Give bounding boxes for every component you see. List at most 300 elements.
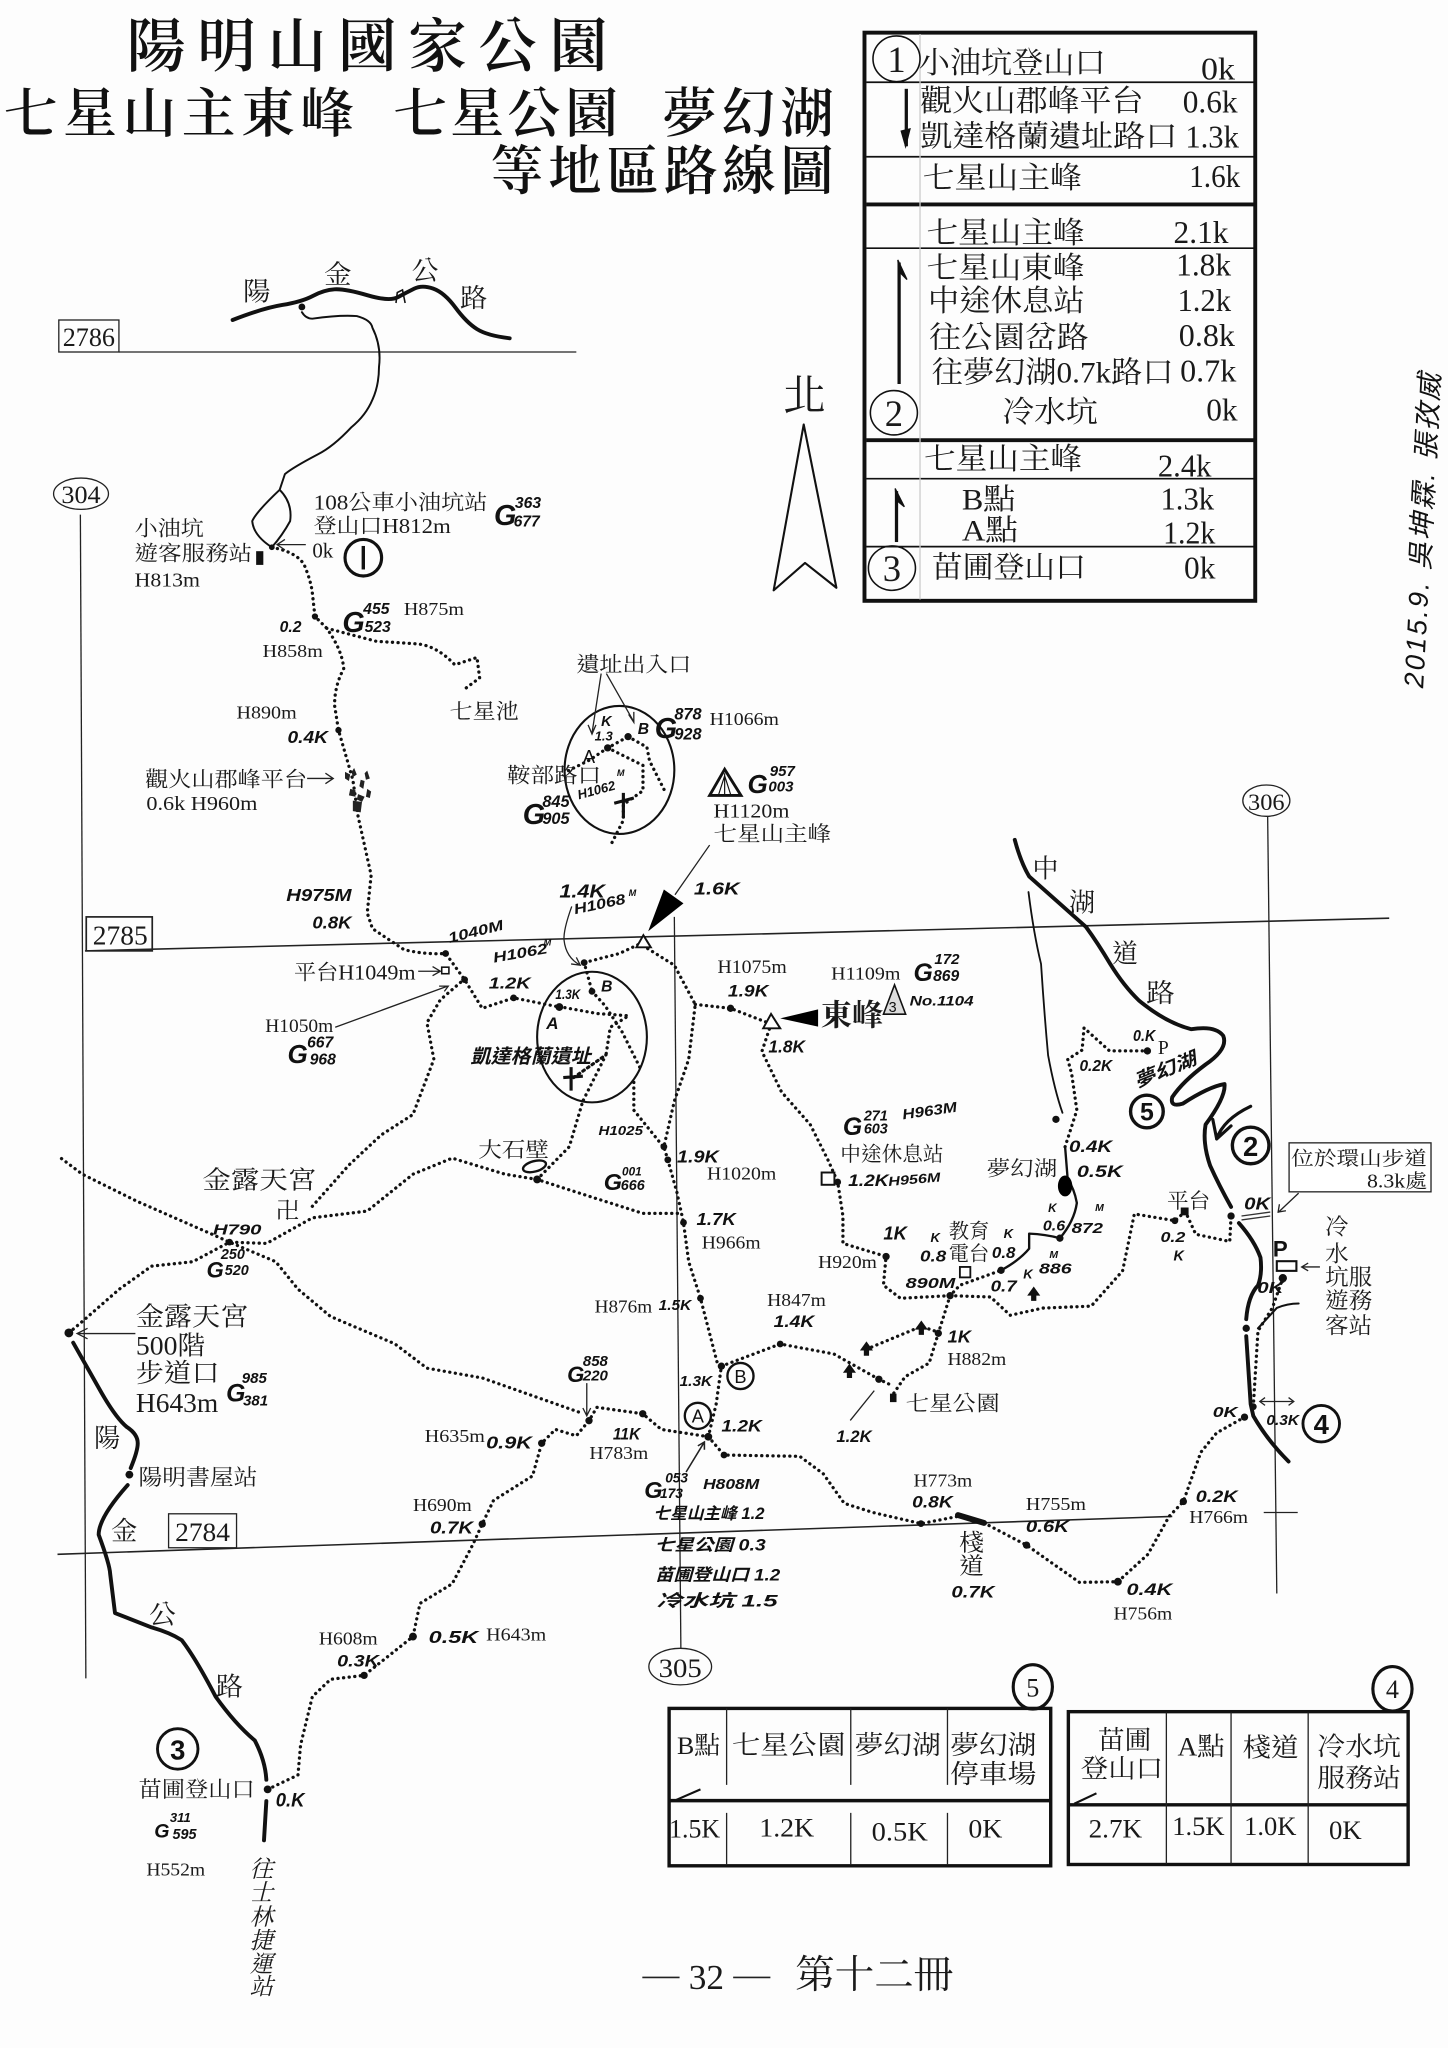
label: 冷水坑服遊務客站: 冷 xyxy=(1325,1214,1349,1239)
grid line 2785: 2785 xyxy=(93,920,148,950)
grid line 2786: 2786 xyxy=(63,323,115,352)
dotted trails xyxy=(61,547,1283,1789)
label: 金露天宮500階步道口 xyxy=(136,1303,248,1418)
panel: 凱達格蘭 ruin circle xyxy=(537,972,647,1102)
icon: 七星公園 black square xyxy=(890,1394,897,1402)
panel: route distance table: 冷水坑 xyxy=(1002,396,1098,429)
label: coordinates G271 603 H963M: 271 xyxy=(863,1109,888,1125)
label: junction note handwritten: 七星公園 0.3 xyxy=(655,1536,766,1554)
label: coordinates G311 595: 311 xyxy=(170,1810,191,1825)
label: 0K with underline: 0K xyxy=(1244,1193,1272,1213)
label: 1.9K west: 1.9K xyxy=(677,1146,720,1166)
panel: route distance table: 0k xyxy=(1184,551,1216,586)
footer: page number and volume xyxy=(642,1954,953,1997)
icon: 平台 square xyxy=(442,967,449,974)
label: coordinates G667 968: 667 xyxy=(307,1035,335,1052)
label: 棧道: 棧 xyxy=(959,1529,984,1556)
label: 七星公園: 七星公園 xyxy=(906,1392,1000,1416)
label: coordinates G455 523 xyxy=(342,601,391,639)
label: 遺址出入口: 遺址出入口 xyxy=(576,652,691,676)
panel: table 4 distances: 1.5K xyxy=(1172,1812,1225,1841)
panel: route distance table: 2.1k xyxy=(1174,215,1229,250)
label: junction note handwritten: 冷水坑 1.5 xyxy=(656,1592,778,1611)
label: junction note handwritten: G xyxy=(644,1477,663,1503)
label: H847m 1.4K: 1.4K xyxy=(774,1312,816,1331)
trail: branch to 七星池 xyxy=(327,628,480,690)
trail: 金露天宮 cross link xyxy=(61,1159,578,1412)
label: 東峰: 東峰 xyxy=(821,999,883,1032)
label: junction note handwritten: H808M xyxy=(703,1477,761,1493)
arrow: to 觀火山郡峰 xyxy=(307,773,333,784)
grid line 305: 305 xyxy=(659,1654,702,1683)
label: junction note handwritten: 苗圃登山口 1.2 xyxy=(655,1565,781,1584)
label: H847m 1.4K xyxy=(767,1290,826,1331)
label: 1.7K: 1.7K xyxy=(697,1209,737,1229)
trail: around 夢幻湖 xyxy=(1065,1028,1147,1147)
label: H1062M 1.2K: H1062 xyxy=(492,941,549,967)
panel: route distance table: 中途休息站 xyxy=(928,285,1085,318)
label: 平台 east: 平台 xyxy=(1167,1189,1210,1213)
label: coordinates G001 666: 666 xyxy=(621,1178,646,1194)
panel: route distance table: B點 xyxy=(962,483,1015,516)
icon: 冷水坑 service station box xyxy=(1277,1261,1296,1271)
label: K 0.6 872M: M xyxy=(1095,1203,1104,1214)
label: 觀火山郡峰平台: 觀火山郡峰平台 xyxy=(145,767,307,791)
panel: table 5 distances: 停車場 xyxy=(950,1760,1036,1789)
arrow: from H1050m xyxy=(335,986,448,1027)
panel: route distance table: 小油坑登山口 xyxy=(919,47,1106,80)
label: K 0.6 872M xyxy=(1043,1202,1104,1237)
road: 陽金公路 south: 路 xyxy=(216,1672,243,1701)
label: 0.4K 0.5K: 0.4K xyxy=(1069,1137,1114,1156)
icon: 平台 black square xyxy=(1181,1208,1189,1215)
arrow: to 金露天宮 trailhead xyxy=(77,1328,135,1339)
label: coordinates G172 869 No.1104: G xyxy=(913,960,933,987)
label: upper ruin A B markers: K xyxy=(601,714,613,730)
label: H858m: H858m xyxy=(263,641,323,661)
road: 陽金公路 north: 陽 xyxy=(243,277,271,306)
label: 0.5K: 0.5K xyxy=(429,1627,480,1647)
panel: 鞍部 ruin circle xyxy=(565,706,674,834)
trail: 金露天宮步道 east xyxy=(69,1158,678,1333)
label: upper ruin A B markers: 1.3 xyxy=(595,729,614,744)
icon: marker B xyxy=(727,1363,754,1389)
label: 1.4K H1068M xyxy=(559,880,637,918)
label: 1040M: 1040M xyxy=(447,917,506,947)
icon: 棧道 thick segment xyxy=(958,1515,984,1523)
label: 1.4K H1068M: M xyxy=(629,888,637,898)
label: 教育電台: 教育 xyxy=(949,1220,989,1243)
label: 金露天宮500階步道口: 步道口 xyxy=(136,1359,220,1388)
arrow: to service station xyxy=(1302,1263,1320,1271)
label: 0.4K: 0.4K xyxy=(288,727,329,747)
panel: table 5 distances: 1.2K xyxy=(759,1813,814,1842)
label: 0.K: 0.K xyxy=(276,1789,306,1811)
arrow: to 凱達格蘭 junction xyxy=(564,906,580,965)
road: 小油坑 access road xyxy=(252,312,380,547)
label: 0K service: 0K xyxy=(1257,1280,1286,1297)
label: 教育電台: 電台 xyxy=(949,1242,989,1265)
label: H875m: H875m xyxy=(404,599,464,619)
label: coordinates G363 677: G xyxy=(494,500,516,532)
label: 往士林捷運站: 士 xyxy=(250,1880,276,1906)
label: H966m: H966m xyxy=(702,1233,761,1253)
label: 1.2K H956M: 1.2K xyxy=(848,1171,891,1190)
panel: table 4 distances: 0K xyxy=(1329,1816,1362,1845)
callout: 位於環山步道 xyxy=(1289,1143,1431,1192)
panel: route distance table: 2 xyxy=(885,393,903,434)
panel: table 4 distances: 1.0K xyxy=(1244,1812,1297,1841)
signature: handwritten date and authors: 2015.9. 吳坤霖. 張孜威 xyxy=(1398,369,1446,690)
panel: table 4 distances: 4 xyxy=(1386,1675,1399,1704)
label: 0.4K H756m: 0.4K xyxy=(1127,1580,1174,1599)
panel: route distance table: 0k xyxy=(1206,393,1238,428)
label: K 0.6 872M: 0.6 xyxy=(1043,1218,1066,1234)
label: H890m: H890m xyxy=(237,702,297,722)
icon: rest station square xyxy=(822,1173,834,1185)
label: K 0.8 890M xyxy=(906,1230,957,1292)
label: H847m 1.4K: H847m xyxy=(767,1290,826,1310)
label: 1.5K near H876m: 1.5K xyxy=(659,1298,693,1314)
label: coordinates G311 595: 595 xyxy=(173,1827,197,1843)
title: 夢幻湖 xyxy=(663,84,834,144)
grid line 2785 xyxy=(85,917,1389,951)
trail: 卍 to 平台 xyxy=(312,979,465,1206)
footer: page number and volume: 32 xyxy=(689,1958,724,1997)
label: 往士林捷運站: 捷 xyxy=(250,1929,277,1955)
trail: peak to 凱達格蘭 xyxy=(584,942,643,991)
road: 中湖道路: 中 xyxy=(1032,855,1059,884)
road: 陽金公路 south: 公 xyxy=(149,1601,176,1630)
arrow: main peak wedge xyxy=(648,845,710,931)
arrow: to A point xyxy=(686,1442,704,1472)
icon: radio station square xyxy=(960,1267,970,1277)
panel: table 5 distances: B點 xyxy=(677,1732,720,1760)
road: 陽金公路 north xyxy=(233,257,510,338)
icon: east peak triangle xyxy=(763,1014,780,1028)
icon: rock xyxy=(522,1158,547,1174)
road: 中湖道路: 路 xyxy=(1146,979,1175,1008)
label: 小油坑遊客服務站: 遊客服務站 xyxy=(135,541,252,565)
label: coordinates G845 905: G xyxy=(523,799,545,831)
icon: cross upper ruin xyxy=(614,793,634,818)
label: 鞍部路口: 鞍部路口 xyxy=(507,763,601,787)
label: coordinates G667 968: G xyxy=(288,1039,308,1069)
label: 108公車小油坑站 xyxy=(314,490,487,538)
label: coordinates G985 381: G xyxy=(226,1380,245,1407)
icon: north arrow xyxy=(774,374,836,590)
label: 1K H882m: H882m xyxy=(947,1349,1006,1369)
label: 平台H1049m: 平台H1049m xyxy=(294,961,416,985)
label: coordinates G878 928: 928 xyxy=(674,725,703,743)
label: K 0.6 872M: 872 xyxy=(1072,1221,1103,1237)
label: junction note handwritten: 173 xyxy=(660,1486,683,1501)
label: 觀火山郡峰平台 xyxy=(145,767,307,815)
label: 夢幻湖: 夢幻湖 xyxy=(987,1158,1057,1181)
label: coordinates G985 381: 985 xyxy=(242,1370,267,1387)
label: 1.2K H956M: H956M xyxy=(888,1169,942,1189)
label: H790 G250 520 xyxy=(206,1222,261,1282)
icon: route marker 5 xyxy=(1131,1095,1163,1128)
label: H755m 0.6K xyxy=(1026,1494,1086,1536)
label: junction note handwritten xyxy=(644,1470,781,1611)
label: 冷水坑服遊務客站: 坑服 xyxy=(1325,1265,1372,1290)
arrow: east peak wedge xyxy=(780,1009,818,1027)
icon: north arrow: 北 xyxy=(783,374,826,420)
label: K 0.8 890M: 0.8 xyxy=(920,1249,947,1266)
trail: 凱達格蘭 ruin xyxy=(559,991,640,1101)
label: 0.4K 0.5K: 0.5K xyxy=(1077,1162,1125,1181)
label: 0.7K xyxy=(991,1267,1034,1296)
label: 往士林捷運站: 站 xyxy=(250,1974,276,2000)
label: 108公車小油坑站: 登山口H812m xyxy=(314,514,451,538)
label: 陽明書屋站: 陽明書屋站 xyxy=(139,1465,257,1490)
icon: route marker 4 xyxy=(1303,1405,1340,1442)
label: 0.4K 0.5K xyxy=(1069,1137,1125,1181)
label: upper ruin A B markers: A xyxy=(583,746,596,767)
road: 冷水坑 spur xyxy=(1258,1304,1299,1328)
title: 陽明山國家公園 xyxy=(127,15,608,80)
panel: table 5 distances: 5 xyxy=(1026,1674,1039,1703)
label: H790 G250 520: 520 xyxy=(225,1263,249,1279)
icon: visitor centre square xyxy=(256,551,263,565)
label: 0.2: 0.2 xyxy=(280,619,302,636)
label: 七星池: 七星池 xyxy=(450,699,519,723)
label: coordinates G455 523: 455 xyxy=(362,601,390,618)
label: H1050m: H1050m xyxy=(265,1016,334,1037)
label: 0.7K: 0.7K xyxy=(430,1517,475,1537)
label: coordinates G667 968 xyxy=(288,1035,336,1069)
label: coordinates G271 603 H963M: H963M xyxy=(901,1100,959,1123)
panel: route distance table: 苗圃登山口 xyxy=(932,551,1086,584)
label: 1.8K: 1.8K xyxy=(768,1037,806,1057)
label: 教育電台 xyxy=(949,1220,989,1265)
icon: cross lower ruin xyxy=(563,1067,583,1091)
grid line 2784: 2784 xyxy=(175,1518,230,1547)
label: H1062M 1.2K: M xyxy=(544,938,552,948)
panel: route distance table: A點 xyxy=(962,515,1018,548)
label: 0.4K H756m: H756m xyxy=(1113,1604,1172,1624)
panel: route distance table: 凱達格蘭遺址路口 xyxy=(920,120,1177,153)
icon: east peak benchmark xyxy=(883,985,906,1016)
label: H1075m: H1075m xyxy=(717,957,787,978)
label: 0.9K: 0.9K xyxy=(486,1432,533,1452)
label: coordinates G271 603 H963M: 603 xyxy=(864,1122,888,1138)
label: 0.7K: K xyxy=(1023,1267,1034,1282)
panel: table 4 distances: 棧道 xyxy=(1243,1734,1299,1763)
label: H1066m: H1066m xyxy=(710,709,779,729)
label: coordinates G363 677 xyxy=(494,495,541,532)
label: 冷水坑服遊務客站 xyxy=(1325,1214,1372,1339)
trail: north end to 冷水坑 xyxy=(1253,1278,1283,1407)
label: 1K north: 1K xyxy=(883,1223,909,1244)
label: coordinates G271 603 H963M xyxy=(843,1100,959,1141)
label: 金露天宮500階步道口: H643m xyxy=(136,1388,218,1418)
panel: table 4 distances: 2.7K xyxy=(1089,1815,1142,1844)
grid line 305 xyxy=(649,917,712,1685)
label: coordinates G311 595: G xyxy=(154,1821,169,1843)
label: H766m 0.2K: H766m xyxy=(1189,1507,1248,1527)
label: coordinates G878 928: 878 xyxy=(674,706,703,724)
icon: 夢幻湖 lake xyxy=(1058,1176,1072,1196)
label: 往士林捷運站 xyxy=(250,1857,277,2000)
label: 0.7K: 0.7 xyxy=(991,1279,1018,1296)
label: 大石壁: 大石壁 xyxy=(478,1138,549,1162)
label: H755m 0.6K: 0.6K xyxy=(1026,1517,1071,1536)
icon: marker A: A xyxy=(692,1405,705,1426)
panel: route distance table: 1.8k xyxy=(1176,248,1231,283)
label: 1.3K: 1.3K xyxy=(680,1374,714,1390)
panel: route distance table: 0.8k xyxy=(1179,318,1235,353)
label: 0.K P xyxy=(1133,1028,1169,1059)
label: ruin A B 1.3K: A xyxy=(545,1014,559,1033)
label: coordinates G001 666: 001 xyxy=(622,1166,642,1179)
trail: A point east to 棧道 and 冷水坑 xyxy=(708,1417,1245,1582)
label: H552m: H552m xyxy=(146,1860,205,1880)
icon: route marker 3: 3 xyxy=(170,1734,185,1765)
label: coordinates G172 869 No.1104: 869 xyxy=(933,968,960,985)
label: 0.2 K east xyxy=(1160,1230,1186,1264)
label: H1062M 1.2K: 1.2K xyxy=(489,976,533,993)
label: 小油坑遊客服務站: H813m xyxy=(135,570,200,591)
label: 108公車小油坑站: 108公車小油坑站 xyxy=(314,490,487,514)
label: coordinates G271 603 H963M: G xyxy=(843,1114,862,1141)
panel: table 5 distances: 夢幻湖 xyxy=(950,1731,1036,1760)
trail: 大石壁 to ruin xyxy=(537,1082,663,1179)
icon: forest trees xyxy=(843,1287,1040,1378)
panel: route distance table: 0.6k xyxy=(1183,84,1238,119)
road: 陽金公路 south: 金 xyxy=(111,1517,137,1546)
panel: table 4 distances: 冷水坑 xyxy=(1317,1732,1401,1761)
road: 陽金公路 north: 路 xyxy=(460,284,487,313)
trail: 七星公園 link xyxy=(893,1296,950,1395)
label: junction note handwritten: 七星山主峰 1.2 xyxy=(653,1505,765,1523)
label: coordinates G172 869 No.1104: No.1104 xyxy=(910,994,974,1009)
title: 等地區路線圖 xyxy=(490,141,834,201)
label: H783m: H783m xyxy=(589,1443,648,1463)
label: coordinates G363 677: 363 xyxy=(515,495,541,512)
label: 0.8K: 0.8K xyxy=(312,913,353,933)
label: coordinates G455 523: 523 xyxy=(365,619,391,636)
road: 陽金公路 south xyxy=(73,1343,266,1840)
label: H790 G250 520: G xyxy=(206,1257,224,1282)
label: 金露天宮500階步道口: 金露天宮 xyxy=(136,1303,248,1332)
label: coordinates G001 666 xyxy=(604,1166,646,1195)
arrow: to start point xyxy=(277,539,306,550)
label: coordinates G858 220: 220 xyxy=(582,1368,609,1385)
grid line 2786 xyxy=(59,320,576,352)
road: 中湖道路: 湖 xyxy=(1069,889,1095,918)
panel: route distance table: 七星山主峰 xyxy=(927,217,1085,250)
label: H1120m 七星山主峰 xyxy=(714,802,831,846)
label: 苗圃登山口: 苗圃登山口 xyxy=(139,1777,255,1802)
icon: 觀火山郡峰 rock cluster xyxy=(345,768,371,812)
title: 七星公園 xyxy=(393,84,618,144)
label: K 0.8 east xyxy=(992,1226,1016,1262)
panel: route distance table: 七星山主峰 xyxy=(923,162,1082,195)
label: upper ruin A B markers xyxy=(576,714,649,802)
panel: route distance table: 1.2k xyxy=(1163,515,1216,550)
label: H766m 0.2K xyxy=(1189,1487,1248,1527)
label: K 0.8 890M: 890M xyxy=(906,1276,957,1292)
panel: route distance table: 1.3k xyxy=(1185,120,1239,155)
road: 中湖道路: 道 xyxy=(1112,940,1138,969)
label: 凱達格蘭遺址 handwritten: 凱達格蘭遺址 xyxy=(470,1046,593,1068)
label: 棧道: 道 xyxy=(959,1553,984,1580)
label: M 886 xyxy=(1039,1250,1073,1277)
panel: route distance table: 1.6k xyxy=(1189,159,1241,194)
label: 夢幻湖 handwritten: 夢幻湖 xyxy=(1131,1047,1202,1092)
label: coordinates G985 381: 381 xyxy=(243,1392,268,1409)
label: coordinates G172 869 No.1104: 172 xyxy=(934,951,960,968)
label: coordinates G878 928: G xyxy=(655,713,677,745)
label: 1.2K with pointer: 1.2K xyxy=(836,1428,873,1446)
label: M 886: M xyxy=(1049,1250,1058,1261)
label: coordinates G845 905: 905 xyxy=(542,810,571,828)
label: P parking: P xyxy=(1273,1236,1288,1261)
label: 1.4K H1068M: H1068 xyxy=(573,892,627,918)
waypoint dots xyxy=(64,304,1287,1793)
grid line 306: 306 xyxy=(1248,790,1285,816)
icon: route marker 3 xyxy=(157,1729,198,1769)
label: H876m: H876m xyxy=(595,1297,652,1317)
label: 0.K P: P xyxy=(1158,1038,1169,1059)
arrow: direction of route 2 xyxy=(1213,1106,1251,1139)
label: junction note handwritten: 053 xyxy=(665,1470,688,1485)
label: 1.2K H956M xyxy=(848,1169,942,1190)
label: coordinates G957 003: 003 xyxy=(768,779,794,796)
label: upper ruin A B markers: H1062 xyxy=(576,778,618,802)
label: H1062M 1.2K xyxy=(489,938,552,993)
panel: table 5 distances: 1.5K xyxy=(669,1815,720,1844)
label: coordinates G878 928 xyxy=(655,706,703,745)
label: K 0.8 890M: K xyxy=(930,1230,941,1245)
label: H608m: H608m xyxy=(319,1628,378,1648)
road: 陽金公路 north: 公 xyxy=(412,257,439,286)
panel: table 5 distances: 0K xyxy=(968,1815,1003,1844)
footer: page number and volume: 第十二冊 xyxy=(795,1954,953,1997)
label: upper ruin A B markers: M xyxy=(617,768,625,778)
label: H773m 0.8K xyxy=(912,1470,972,1511)
grid line 304 xyxy=(54,478,108,1678)
label: 金露天宮 卍 xyxy=(203,1167,316,1225)
label: 0K south: 0K xyxy=(1213,1404,1239,1421)
label: 0k start: 0k xyxy=(312,539,334,563)
label: H1020m: H1020m xyxy=(707,1163,776,1183)
label: 小油坑遊客服務站 xyxy=(135,517,252,591)
label: 11K: 11K xyxy=(613,1424,642,1443)
panel: route distance table: 觀火山郡峰平台 xyxy=(920,85,1144,118)
label: H773m 0.8K: 0.8K xyxy=(912,1492,955,1511)
label: H643m: H643m xyxy=(486,1624,546,1644)
label: ruin A B 1.3K: 1.3K xyxy=(555,987,581,1002)
icon: route marker 1 xyxy=(345,539,382,576)
label: upper ruin A B markers: B xyxy=(638,721,649,738)
label: 觀火山郡峰平台: 0.6k H960m xyxy=(146,794,257,815)
title: 七星山主東峰 xyxy=(4,84,354,144)
label: H755m 0.6K: H755m xyxy=(1026,1494,1086,1514)
label: ruin A B 1.3K xyxy=(545,978,612,1033)
panel: route distance table: 1.2k xyxy=(1177,283,1231,318)
panel: table 4 distances: 苗圃 xyxy=(1098,1726,1151,1755)
panel: route distance table: 2.4k xyxy=(1158,449,1212,484)
icon: route marker 5: 5 xyxy=(1140,1100,1154,1127)
callout: 位於環山步道: 8.3k處 xyxy=(1367,1170,1427,1192)
label: H1120m 七星山主峰: 七星山主峰 xyxy=(714,822,831,846)
label: 1.2K at A: 1.2K xyxy=(721,1417,764,1436)
trail: peak to junction south xyxy=(643,946,721,1437)
label: coordinates G172 869 No.1104 xyxy=(910,951,974,1009)
